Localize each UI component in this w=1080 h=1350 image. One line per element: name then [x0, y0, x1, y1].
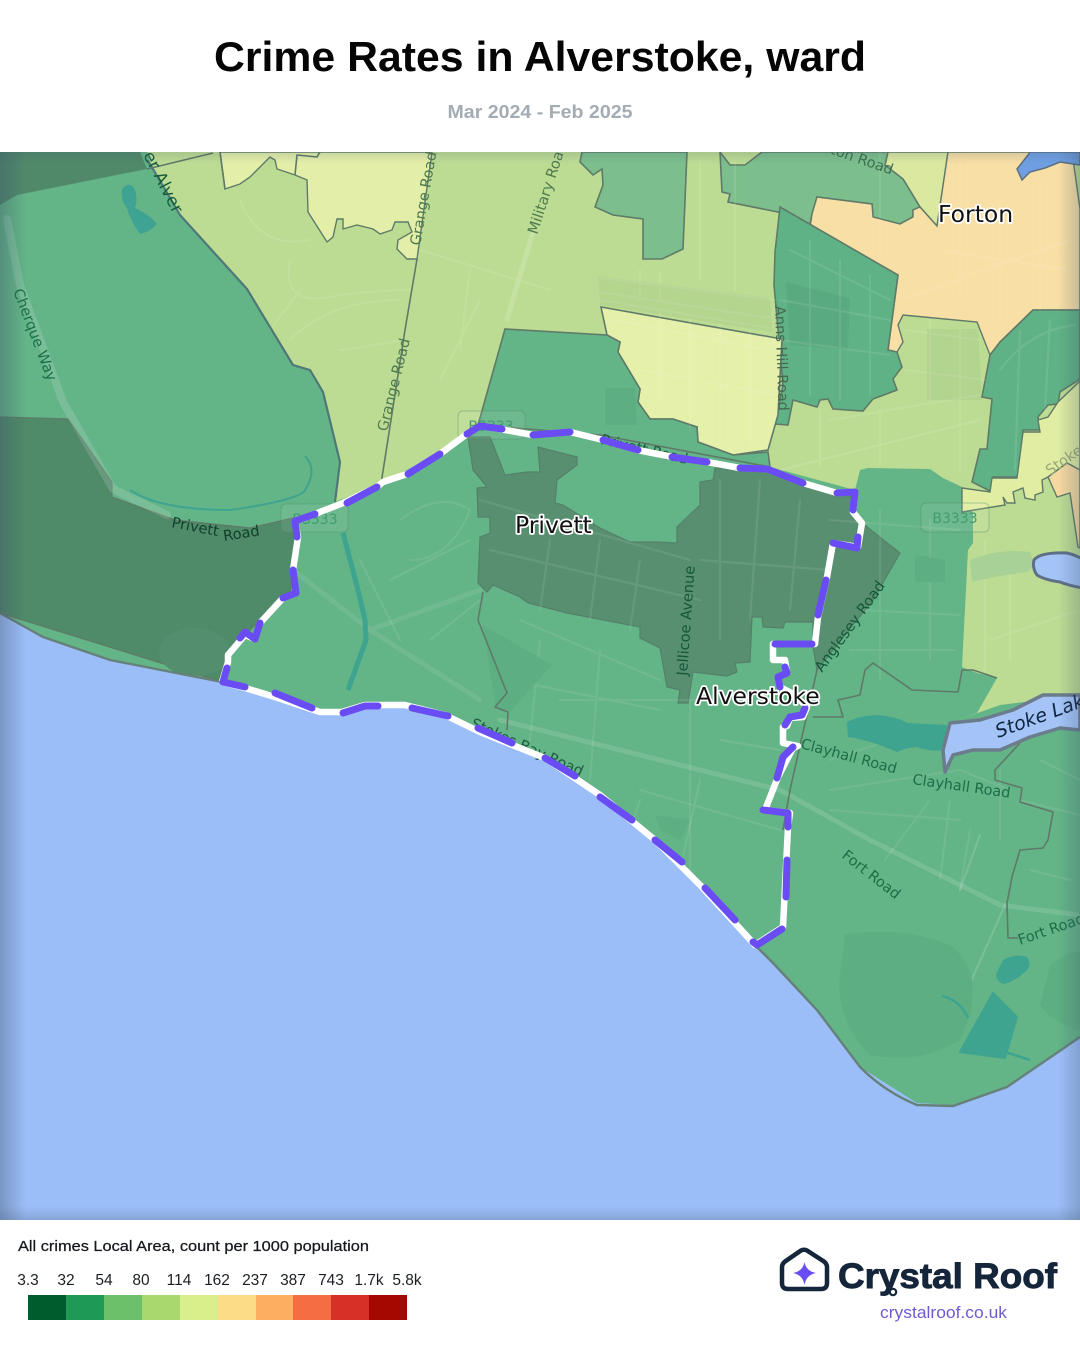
lake: north-east corner [1017, 152, 1080, 180]
legend values [17, 1272, 422, 1289]
label: Clayhall Road west: Clayhall Road [799, 736, 898, 777]
shield: B3333 west [281, 504, 348, 532]
pond: Fort Road north [996, 956, 1030, 984]
ward boundaries [147, 152, 1053, 938]
legend values: 237 [242, 1272, 268, 1289]
shield: B3333 east [921, 503, 989, 532]
label: Anglesey Road: Anglesey Road [811, 578, 889, 675]
label: Privett Road west part 1: Privett [170, 514, 221, 540]
subtitle: date range: Mar 2024 - Feb 2025 [448, 102, 632, 122]
area: pale green north of Forton [885, 152, 948, 226]
pond: Fort Road south [960, 993, 1017, 1058]
area: north central mid green [580, 152, 687, 259]
label: Anns Hill Road: Anns Hill Road [771, 306, 792, 411]
pond: north-west [122, 185, 157, 234]
icon: house with star [782, 1250, 827, 1289]
legend values: 387 [280, 1272, 306, 1289]
place: Forton: Forton [938, 200, 1013, 228]
road labels under the ward line: Privett Road [599, 431, 690, 468]
title: Crime Rates in Alverstoke, ward [214, 33, 866, 80]
area: northern light green [147, 152, 1080, 723]
legend values: 3.3 [17, 1272, 39, 1289]
legend values: 743 [318, 1272, 344, 1289]
legend values: 1.7k [354, 1272, 384, 1289]
park and field patches [509, 558, 972, 1042]
field patch east [927, 329, 982, 400]
lighter blob in western dark area [163, 663, 202, 676]
place: Privett: Privett [515, 511, 592, 539]
street network [7, 152, 1080, 1040]
key dot on the y descender [890, 1289, 896, 1295]
field band north of pale block [598, 276, 772, 332]
ward outline: white casing [222, 426, 862, 945]
sea [0, 613, 1080, 1220]
place labels [515, 200, 1013, 710]
pond: Clayhall [847, 715, 947, 752]
shield: B3333 north [458, 411, 525, 439]
wordmark: Crystal Roof [838, 1257, 1057, 1296]
stream in park [130, 456, 312, 510]
legend values: 54 [95, 1272, 113, 1289]
label: Cherque Way: Cherque Way [9, 286, 60, 384]
light field east [970, 551, 1033, 582]
coastline [0, 613, 1080, 1106]
area: Privett dark [468, 437, 900, 703]
area: western dark Gosport [0, 417, 297, 682]
legend colour bar [28, 1295, 407, 1320]
lake: east [1033, 553, 1080, 588]
canal in ward [343, 533, 366, 690]
shield: B3333 north: B3333 [468, 419, 514, 435]
water: ponds and canal [122, 185, 1030, 1060]
ward outline: purple dashes [223, 426, 858, 945]
area: green block around Anns Hill [774, 207, 902, 425]
area: eastern green strip [972, 310, 1080, 492]
label: Grange Road south: Grange Road [374, 337, 414, 433]
logo: Crystal Roof [782, 1250, 1057, 1322]
area: green block north of Privett Road [478, 329, 770, 467]
legend values: 114 [167, 1272, 192, 1289]
map edge shading [0, 152, 1080, 1220]
area: eastern pale yellow [962, 381, 1080, 512]
legend values: 32 [57, 1272, 75, 1289]
area: eastern tan [1048, 463, 1080, 548]
shield: B3333 east: B3333 [932, 511, 978, 527]
label: Clayhall Road east: Clayhall Road [911, 772, 1011, 802]
shield: B3333 west: B3333 [292, 512, 338, 528]
label: Forton Road: Forton Road [807, 134, 895, 178]
label: River Alver: er Alver [139, 148, 187, 217]
label: Jellicoe Avenue: Jellicoe Avenue [674, 565, 699, 677]
legend values: 162 [204, 1272, 230, 1289]
road label: Stokes Bay Road: Stokes Bay Road [468, 716, 586, 780]
label: Grange Road north: Grange Road [407, 150, 440, 247]
land base [0, 152, 1080, 1105]
area: top-left dark [0, 152, 147, 205]
website link: crystalroof.co.uk [880, 1304, 1008, 1322]
darker estate patch in Anns Hill block [786, 282, 850, 350]
label: Military Road: Military Road [525, 140, 570, 236]
area: north-west pale yellow [220, 152, 432, 259]
lake: Stoke Lake [943, 695, 1080, 772]
road shields [281, 411, 989, 532]
legend [17, 1238, 422, 1320]
area: Forton tan [810, 152, 1080, 355]
road labels [9, 134, 1080, 949]
legend values: 80 [132, 1272, 150, 1289]
label: Privett Road west part 2: Road [222, 522, 261, 545]
label: Fort Road west: Fort Road [839, 848, 903, 903]
legend title: All crimes Local Area, count per 1000 population [18, 1238, 369, 1255]
area: north east mid green [720, 152, 920, 224]
stream south [942, 996, 1030, 1060]
legend values: 5.8k [392, 1272, 422, 1289]
place: Alverstoke: Alverstoke [696, 682, 820, 710]
area: pale yellow block [601, 307, 782, 455]
